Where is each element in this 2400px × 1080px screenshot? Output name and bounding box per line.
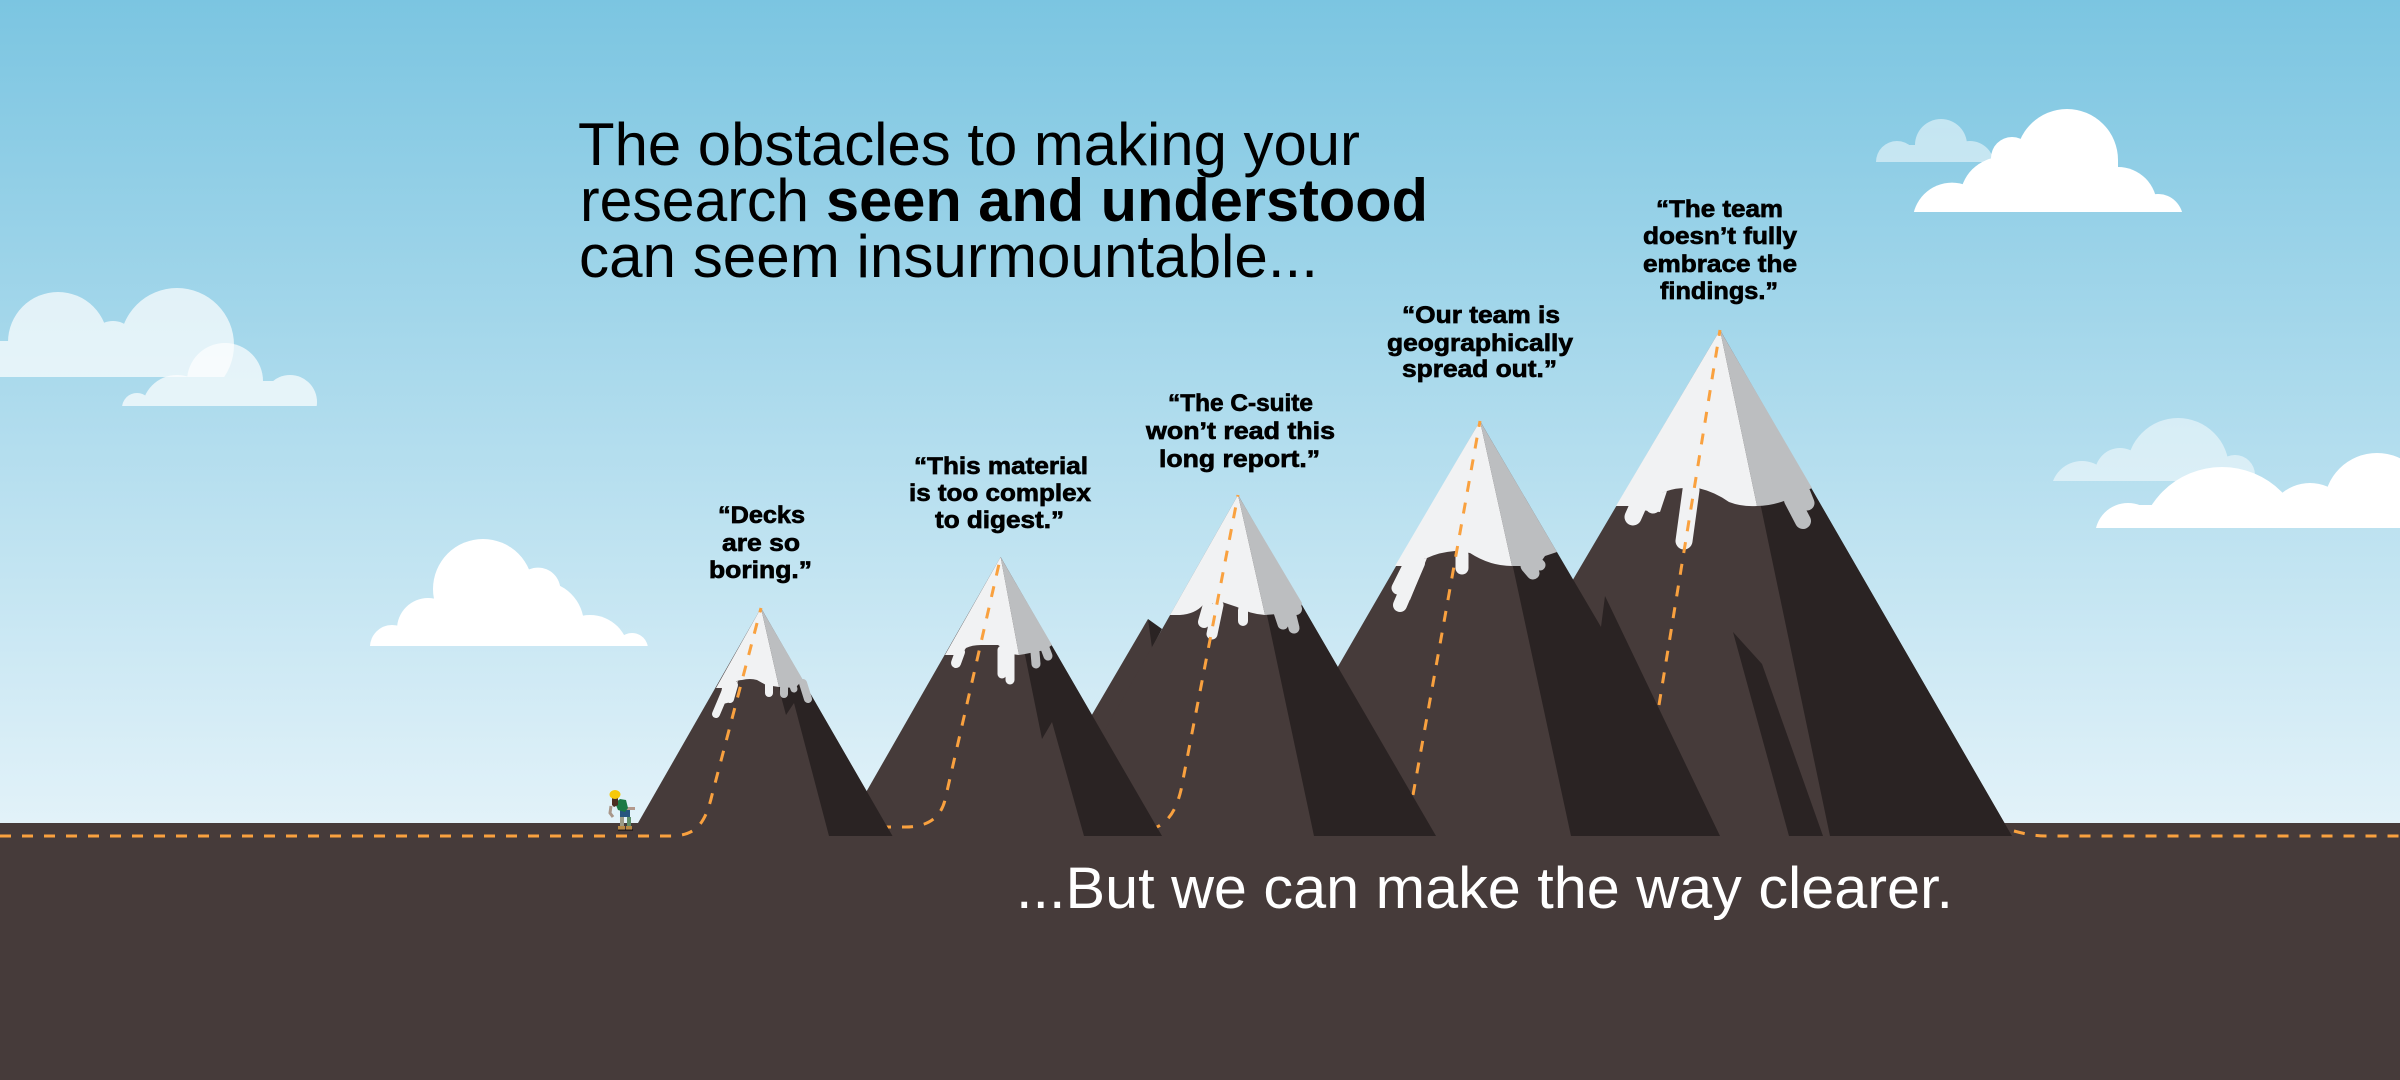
title: The obstacles to making your bbox=[578, 111, 1360, 178]
quote: decks: are so bbox=[722, 530, 800, 557]
quote: embrace findings bbox=[1643, 196, 1798, 305]
trail: mountain 3 bbox=[1150, 495, 1238, 830]
quote: geographically spread: geographically bbox=[1387, 330, 1574, 357]
mountain 4 bbox=[1240, 421, 1720, 836]
trail: exit to the right of the last peak bbox=[2014, 831, 2400, 836]
quote: c-suite: won’t read this bbox=[1145, 418, 1335, 445]
trail: mountain 2 bbox=[880, 557, 1001, 827]
title bbox=[578, 111, 1428, 290]
quote: geographically spread: spread out.” bbox=[1402, 356, 1557, 383]
cloud: mid-left white bbox=[370, 539, 648, 646]
quote: geographically spread: “Our team is bbox=[1402, 302, 1560, 329]
cloud: left small translucent bbox=[122, 343, 317, 406]
icon: climber bbox=[610, 790, 635, 831]
cloud: left large translucent bbox=[0, 288, 234, 377]
quote: too complex bbox=[909, 453, 1092, 534]
quote: too complex: “This material bbox=[914, 453, 1088, 480]
trail: mountain 4 bbox=[1413, 421, 1480, 795]
mountain 3 bbox=[1021, 495, 1436, 836]
trail: mountain 5 bbox=[1659, 330, 1720, 705]
mountain 2 bbox=[841, 557, 1162, 836]
cloud: right pale bbox=[2053, 418, 2255, 481]
quote: too complex: is too complex bbox=[909, 480, 1092, 507]
quote: c-suite: long report.” bbox=[1159, 446, 1320, 473]
quote: embrace findings: embrace the bbox=[1643, 251, 1797, 278]
trail: mountain 1 and ground bbox=[0, 608, 761, 836]
quote: c-suite: “The C-suite bbox=[1168, 390, 1313, 417]
quote: geographically spread bbox=[1387, 302, 1574, 383]
cloud: top right white bbox=[1914, 109, 2182, 212]
title: research bbox=[580, 167, 809, 234]
title: seen and understood bbox=[826, 167, 1428, 234]
quote: embrace findings: findings.” bbox=[1660, 278, 1778, 305]
mountain 5 bbox=[1422, 330, 2012, 836]
quote: too complex: to digest.” bbox=[935, 507, 1064, 534]
title: can seem insurmountable... bbox=[579, 223, 1318, 290]
mountain 1 bbox=[631, 608, 892, 836]
cloud: right white bbox=[2096, 453, 2400, 528]
quote: embrace findings: doesn’t fully bbox=[1643, 223, 1798, 250]
quote: decks: “Decks bbox=[718, 502, 805, 529]
quote: decks: boring.” bbox=[709, 557, 812, 584]
sky background bbox=[0, 0, 2400, 823]
ground bbox=[0, 823, 2400, 1080]
closing statement: ...But we can make the way clearer. bbox=[1016, 856, 1953, 921]
cloud: top right pale bbox=[1876, 119, 1992, 162]
quote: c-suite bbox=[1145, 390, 1335, 473]
quote: embrace findings: “The team bbox=[1656, 196, 1783, 223]
quote: decks bbox=[709, 502, 812, 584]
